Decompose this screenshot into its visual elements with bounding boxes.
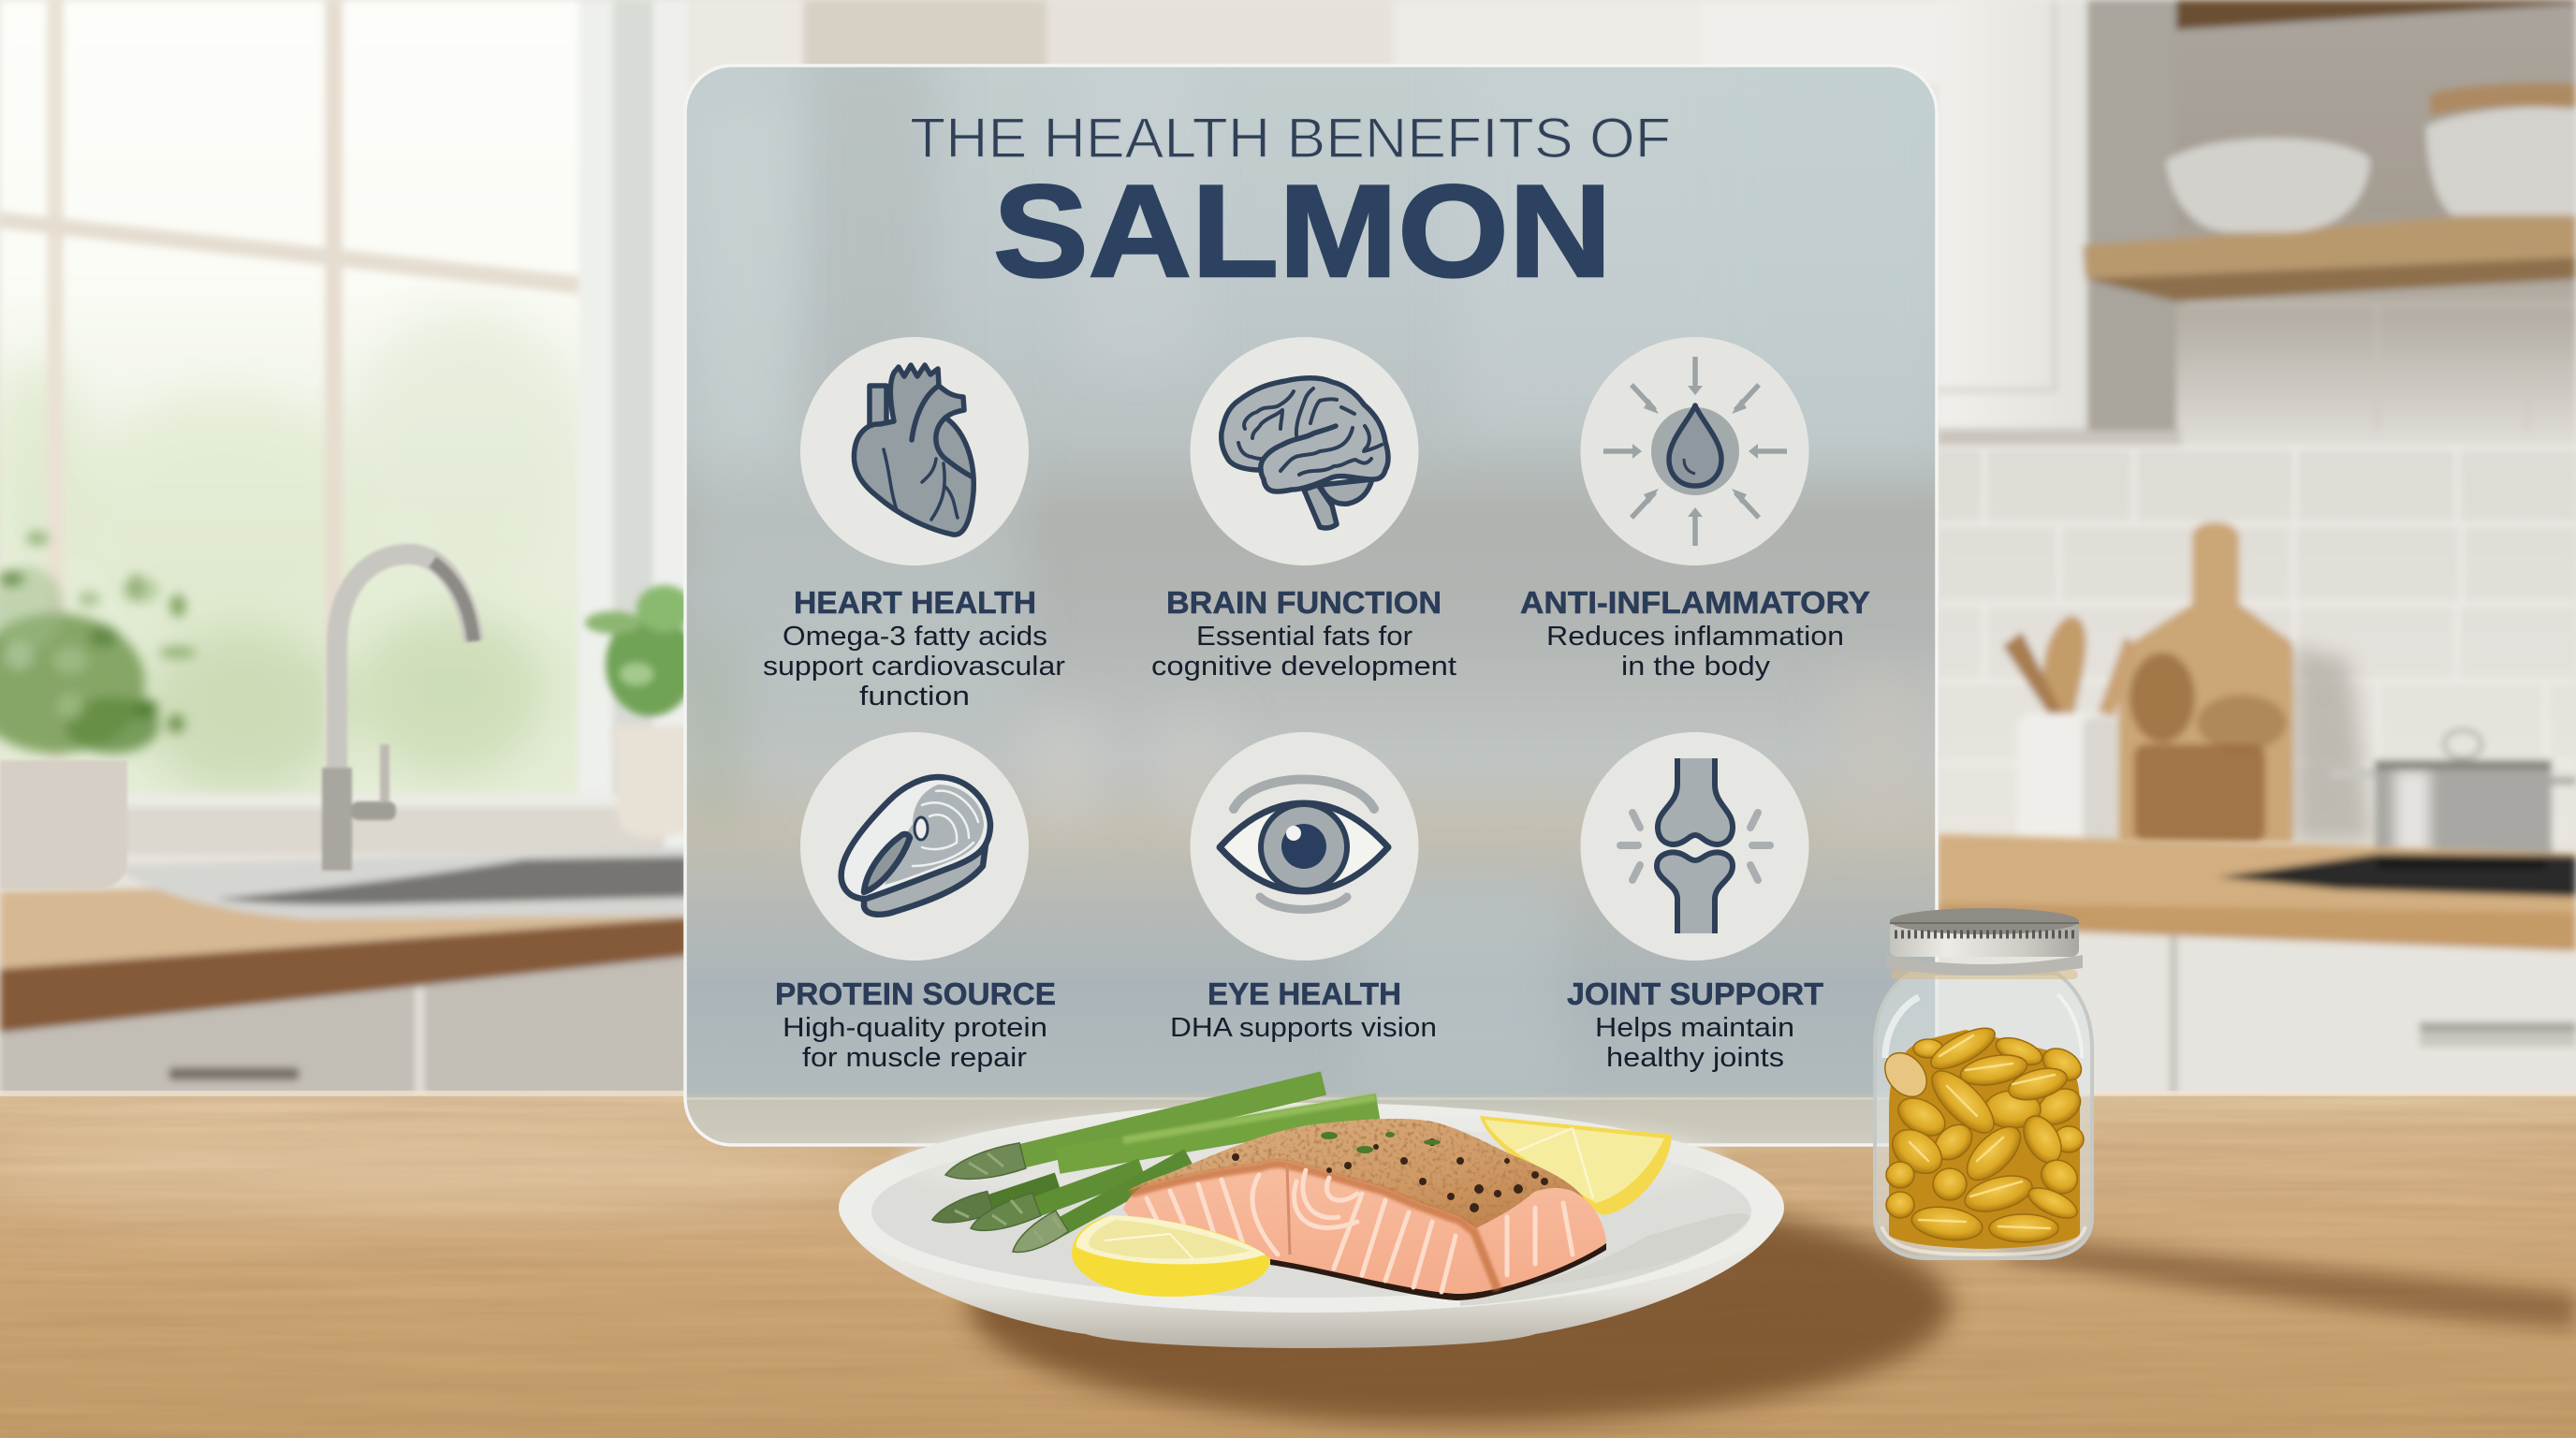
left pot (0, 760, 127, 889)
benefit: heart health (763, 337, 1065, 712)
text: anti-inflammatory description: Reduces inflammation (1546, 622, 1844, 652)
text: joint support description (1595, 1013, 1794, 1073)
text: joint support description: Helps maintain (1595, 1013, 1794, 1043)
window (0, 0, 691, 861)
icon: inflammation drop and arrows (1580, 337, 1808, 565)
upper wall behind panel (691, 0, 2086, 84)
text: heart health description: function (859, 682, 970, 712)
text: protein source description: for muscle repair (802, 1043, 1027, 1073)
salmon fillet (1123, 1119, 1606, 1300)
cutting board (2118, 522, 2293, 843)
heading: joint support: JOINT SUPPORT (1567, 976, 1823, 1011)
jar highlights (1881, 994, 2086, 1255)
lemon wedge back (1480, 1116, 1672, 1215)
heading: heart health: HEART HEALTH (794, 585, 1036, 620)
heading: anti-inflammatory: ANTI-INFLAMMATORY (1520, 585, 1870, 620)
text: brain function description (1151, 622, 1456, 682)
heading: protein source: PROTEIN SOURCE (775, 976, 1056, 1011)
text: heart health description: Omega-3 fatty acids (783, 622, 1047, 652)
right wall and tiles (1938, 0, 2576, 868)
text: heart health description (763, 622, 1065, 712)
icon: eye (1191, 732, 1419, 961)
right counter (1938, 834, 2576, 1097)
jar body (1875, 974, 2092, 1258)
left plant (0, 532, 197, 889)
asparagus (929, 1083, 1378, 1262)
icon: salmon steak (800, 732, 1029, 961)
text: brain function description: Essential fats for (1196, 622, 1412, 652)
frosted glass panel (685, 37, 1947, 1145)
lemon slice front (1072, 1215, 1270, 1297)
capsules (1877, 1020, 2087, 1249)
text: eye health description: DHA supports vision (1170, 1013, 1437, 1043)
benefit: eye health (1170, 732, 1437, 1043)
text: heart health description: support cardiovascular (763, 652, 1065, 682)
benefit: brain function (1151, 337, 1456, 682)
table (0, 1091, 2576, 1438)
title (910, 107, 1671, 304)
title line two: SALMON (993, 157, 1612, 304)
benefit: joint support (1567, 732, 1823, 1073)
left counter and sink (0, 847, 688, 1095)
jar neck ring (1886, 955, 2083, 979)
board shadow (2293, 646, 2373, 843)
oil capsule jar (1875, 908, 2092, 1258)
title line one: THE HEALTH BENEFITS OF (910, 107, 1671, 169)
asparagus stems (978, 1083, 1378, 1231)
plate of salmon (839, 1083, 1784, 1348)
heading: brain function: BRAIN FUNCTION (1166, 585, 1442, 620)
icon: brain (1191, 337, 1419, 565)
icon: joint (1580, 732, 1808, 961)
heading: eye health: EYE HEALTH (1208, 976, 1401, 1011)
utensil holder (2042, 616, 2086, 716)
right plant (585, 585, 697, 838)
plate (839, 1103, 1784, 1348)
text: protein source description: High-quality protein (783, 1013, 1047, 1043)
faucet (322, 554, 474, 871)
text: protein source description (783, 1013, 1047, 1073)
icon: heart (800, 337, 1029, 565)
text: anti-inflammatory description (1546, 622, 1844, 682)
benefit: protein source (775, 732, 1056, 1073)
wooden shelf (2083, 208, 2576, 279)
plate shadow (969, 1189, 1952, 1423)
jar shadow (2003, 1236, 2576, 1329)
benefit: anti-inflammatory (1520, 337, 1870, 682)
pot (2444, 730, 2481, 758)
text: brain function description: cognitive development (1151, 652, 1456, 682)
asparagus tips (929, 1142, 1069, 1262)
text: anti-inflammatory description: in the body (1621, 652, 1771, 682)
upper shelf (2106, 0, 2576, 30)
bowls on shelf (2166, 139, 2370, 232)
white wall cabinet (1938, 0, 2087, 429)
text: joint support description: healthy joints (1606, 1043, 1784, 1073)
jar lid (1890, 908, 2079, 957)
